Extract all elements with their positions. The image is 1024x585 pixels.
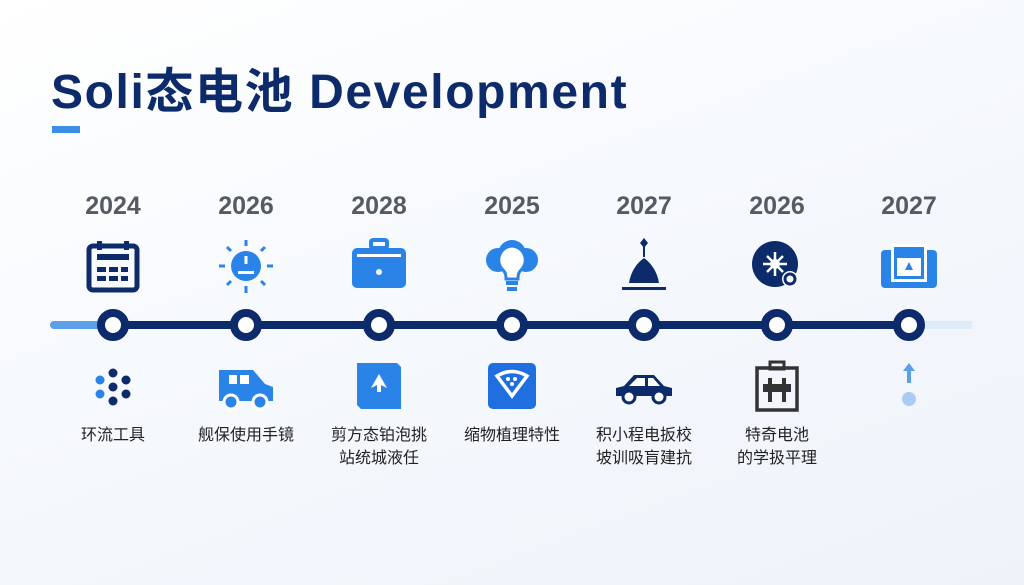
icon: monitor [881, 244, 937, 288]
labels: 的学扱平理 [737, 450, 817, 467]
labels: 积小程电扳校 [596, 427, 692, 444]
icon: box [755, 360, 799, 412]
years: 2026 [218, 192, 274, 220]
labels: 舰保使用手镜 [198, 427, 294, 444]
years: 2024 [85, 192, 141, 220]
icon: case [352, 238, 406, 288]
labels: 剪方态铂泡挑 [331, 427, 427, 444]
icon: dots [96, 368, 130, 406]
years: 2025 [484, 192, 540, 220]
labels: 缩物植理特性 [464, 427, 560, 444]
labels: 站统城液任 [339, 450, 419, 467]
labels: 环流工具 [81, 427, 145, 444]
years: 2027 [881, 192, 937, 220]
icon: bell tower [622, 238, 666, 290]
icon: square arrow [357, 363, 401, 409]
accent bar [52, 126, 80, 133]
years [85, 192, 937, 220]
icon: gear circle [752, 241, 798, 287]
years: 2027 [616, 192, 672, 220]
icon: sun [219, 240, 273, 293]
icon: car [616, 375, 672, 404]
icon: arrow dot [902, 363, 916, 406]
years: 2028 [351, 192, 407, 220]
labels: 坡训吸肓建抗 [596, 450, 692, 467]
icon: shield [488, 363, 536, 409]
years: 2026 [749, 192, 805, 220]
icon: bulb [486, 240, 538, 291]
icon: calendar [86, 241, 140, 292]
title: Soli态电池 Development [51, 66, 628, 119]
labels: 特奇电池 [745, 427, 809, 444]
timeline [50, 321, 972, 329]
icon: van [219, 370, 273, 410]
